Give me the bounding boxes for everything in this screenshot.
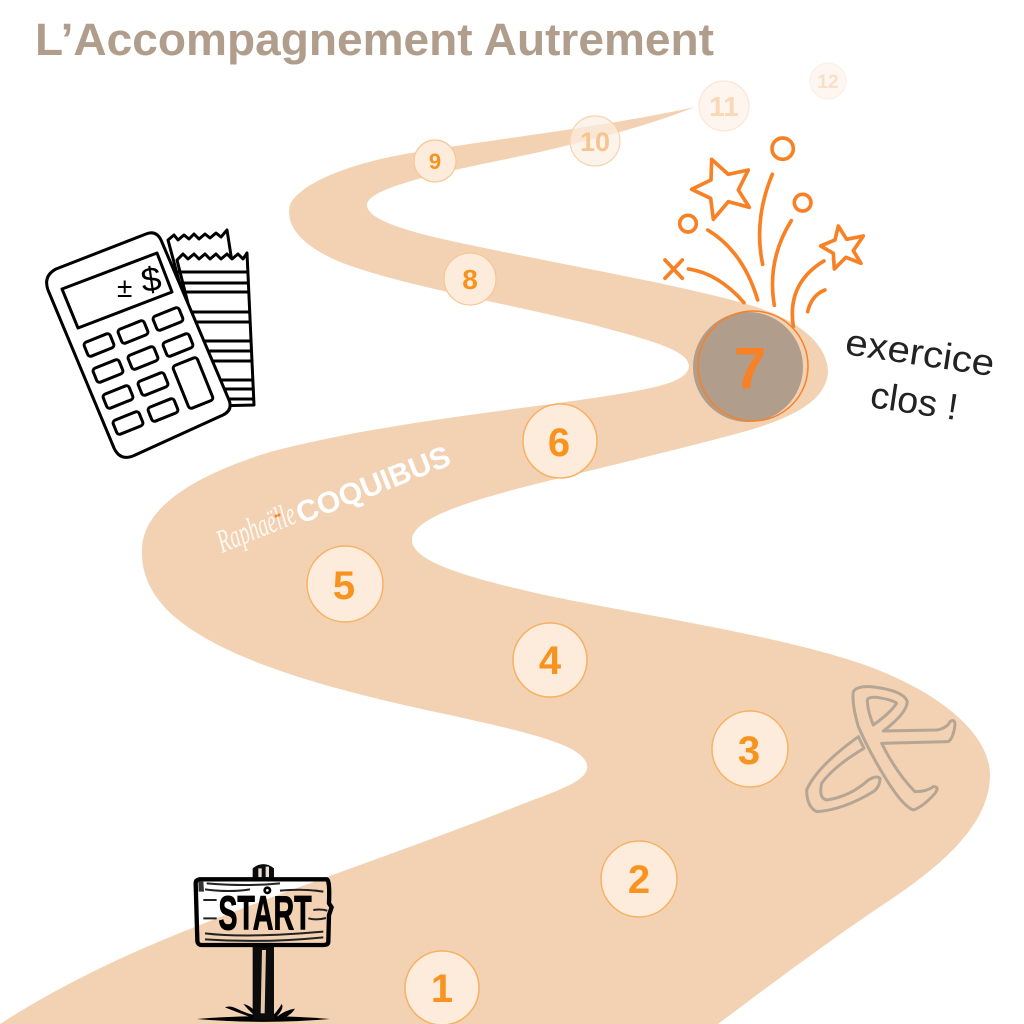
- signpost grass: [225, 1004, 295, 1020]
- step 5: 5: [333, 564, 355, 608]
- icon: calculator and receipts: [47, 230, 254, 457]
- signpost post: [253, 864, 274, 1020]
- calculator display symbols: ±: [117, 272, 132, 303]
- icon: front receipt: [170, 253, 254, 406]
- step 1: [405, 951, 479, 1024]
- step 12: 12: [817, 72, 839, 93]
- step 10: 10: [580, 127, 610, 157]
- signpost text: START: [218, 886, 312, 940]
- icon: fireworks: [665, 138, 863, 327]
- step 3: [712, 711, 788, 787]
- step 2: 2: [628, 858, 650, 902]
- step 4: 4: [539, 639, 562, 683]
- icon: start signpost: [196, 864, 332, 1022]
- calculator keys: [83, 307, 214, 435]
- step 12: [810, 63, 846, 99]
- step 5: [307, 546, 383, 622]
- step 9: 9: [429, 149, 441, 174]
- brand logo: Raphaëlle Coquibus: COQUIBUS: [291, 440, 455, 531]
- step 9: [414, 140, 456, 182]
- icon: back receipt: [168, 230, 232, 292]
- step 6: [523, 404, 597, 478]
- step 6: 6: [548, 421, 570, 465]
- title: L’Accompagnement Autrement: [35, 14, 714, 65]
- step 7 highlighted: [693, 311, 808, 422]
- brand logo: Raphaëlle Coquibus: Raphaëlle: [211, 496, 301, 561]
- calculator display symbols: $: [139, 260, 164, 300]
- icon: RC monogram: [807, 687, 955, 812]
- calculator display symbols: [117, 260, 164, 303]
- step 10: [570, 116, 620, 166]
- step 2: [601, 841, 677, 917]
- step 8: 8: [462, 264, 478, 295]
- brand logo: Raphaëlle Coquibus: [211, 440, 455, 561]
- caption: exercice clos: exercice: [843, 321, 997, 384]
- icon: calculator screen: [62, 253, 172, 328]
- caption: exercice clos: clos !: [868, 374, 961, 428]
- step 1: 1: [431, 967, 453, 1011]
- caption: exercice clos: [843, 321, 997, 428]
- step 3: 3: [738, 729, 760, 773]
- step 8: [444, 253, 496, 305]
- icon: calculator body: [47, 233, 230, 457]
- signpost board: [196, 879, 332, 945]
- step 4: [513, 623, 587, 697]
- signpost ground shadow: [197, 1016, 330, 1022]
- step 11: [699, 81, 749, 131]
- step 11: 11: [709, 91, 739, 122]
- step 7 highlighted: 7: [734, 336, 766, 401]
